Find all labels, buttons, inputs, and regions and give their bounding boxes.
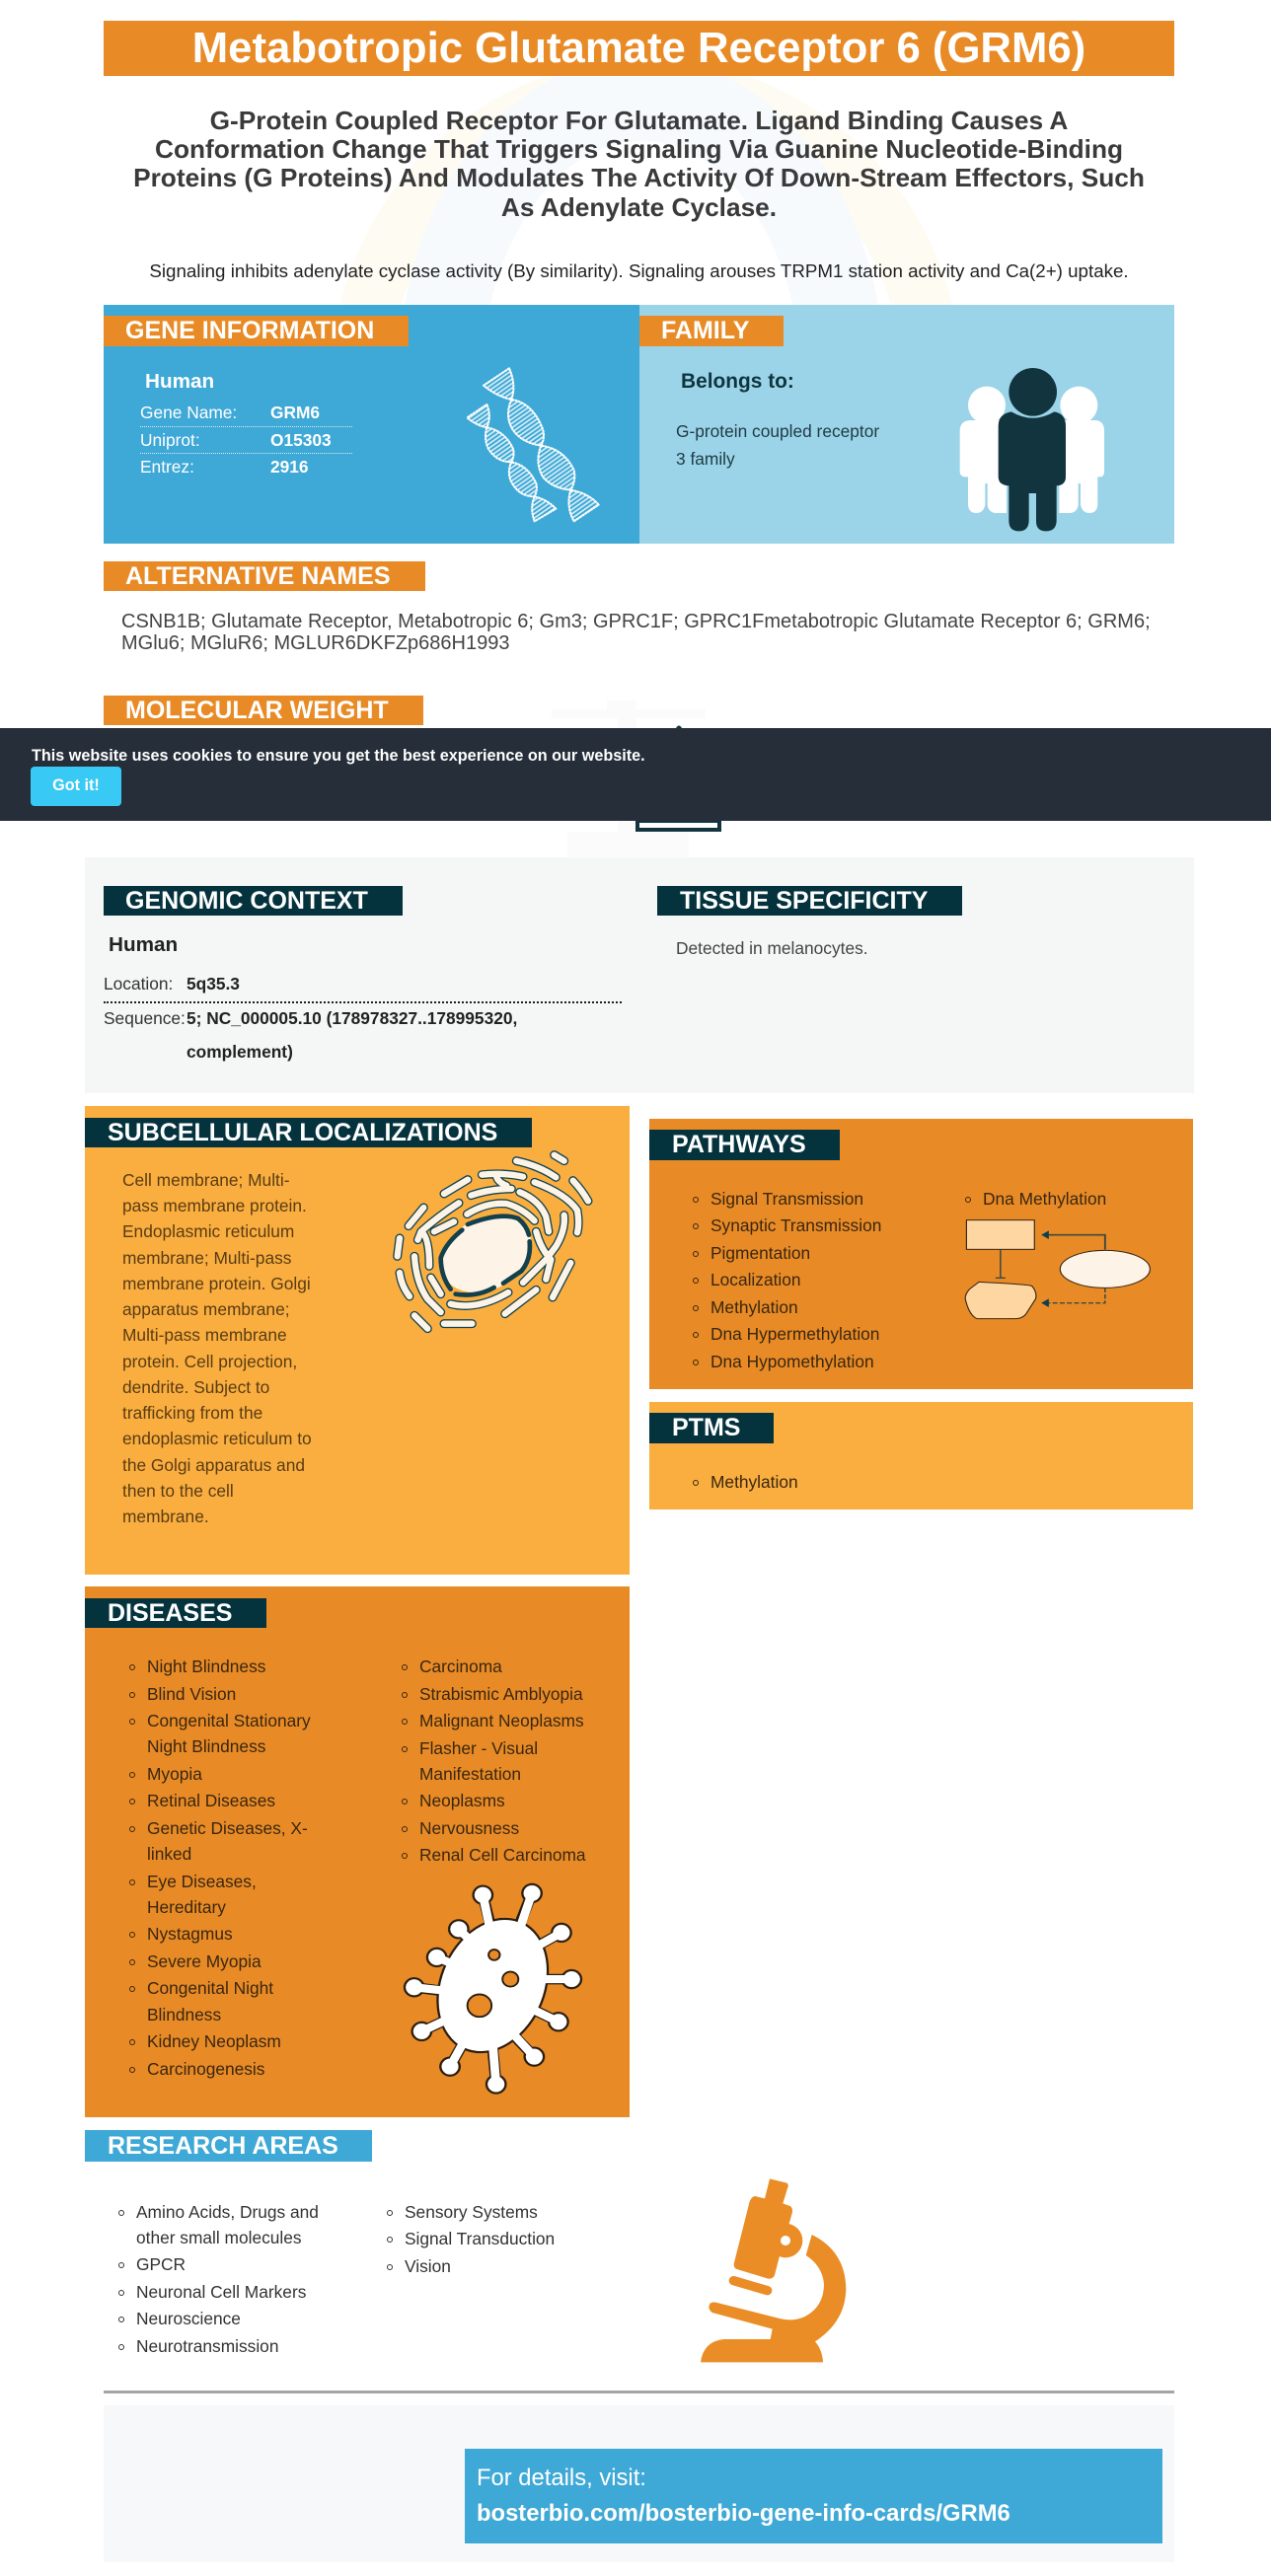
- diseases list: column one: Eye Diseases,: [147, 1872, 257, 1891]
- diseases list: column one: Night Blindness: [147, 1656, 265, 1676]
- icon: virus: [403, 1882, 582, 2095]
- heading: diseases: DISEASES: [108, 1599, 232, 1627]
- family details: Belongs to:: [681, 370, 794, 393]
- subcellular localizations text: Endoplasmic reticulum: [122, 1221, 294, 1241]
- cookie banner: [0, 728, 1271, 821]
- research areas list: column two: Signal Transduction: [405, 2229, 555, 2248]
- genomic context details: Location:: [104, 974, 173, 994]
- heading: diseases: [85, 1598, 266, 1628]
- diseases list: column one: Nystagmus: [147, 1924, 233, 1944]
- subcellular localizations text: [122, 1170, 312, 1526]
- research areas list: column two: Vision: [405, 2256, 451, 2276]
- subcellular localizations text: trafficking from the: [122, 1403, 262, 1423]
- PTMs list: Methylation: [710, 1472, 798, 1492]
- family details: [676, 370, 879, 469]
- pathways list: Dna Hypomethylation: [710, 1352, 874, 1371]
- panel: genomic context and tissue specificity: [85, 857, 1194, 1093]
- diseases list: column one: linked: [147, 1844, 191, 1864]
- gene information details: 2916: [270, 457, 309, 477]
- heading: subcellular localizations: SUBCELLULAR LOCALIZATIONS: [108, 1119, 497, 1146]
- research areas list: column one: GPCR: [136, 2254, 186, 2274]
- pathways list: Pigmentation: [710, 1243, 810, 1263]
- diseases list: column two: Neoplasms: [419, 1791, 505, 1810]
- button: got it: [31, 767, 121, 806]
- heading: pathways: [649, 1130, 840, 1160]
- tissue specificity text: Detected in melanocytes.: [676, 938, 868, 958]
- subcellular localizations text: then to the cell: [122, 1481, 234, 1501]
- diseases list: column one: Severe Myopia: [147, 1951, 262, 1971]
- heading: gene information: GENE INFORMATION: [125, 317, 374, 344]
- research areas list: column one: other small molecules: [136, 2228, 302, 2247]
- pathways list: [693, 1189, 1106, 1371]
- gene information details: Entrez:: [140, 457, 194, 477]
- summary heading: As Adenylate Cyclase.: [501, 192, 777, 222]
- research areas list: column one: [118, 2202, 319, 2356]
- diseases list: column one: Carcinogenesis: [147, 2059, 264, 2079]
- diseases list: column one: Genetic Diseases, X-: [147, 1818, 308, 1838]
- family details: 3 family: [676, 449, 735, 469]
- gene information details: [140, 370, 352, 477]
- heading: family: [639, 316, 784, 346]
- genomic context details: 5; NC_000005.10 (178978327..178995320,: [187, 1008, 517, 1028]
- genomic context details: 5q35.3: [187, 974, 240, 994]
- heading: molecular weight: MOLECULAR WEIGHT: [125, 697, 389, 724]
- panel: diseases: [85, 1586, 630, 2117]
- family details: G-protein coupled receptor: [676, 421, 879, 441]
- summary heading: [133, 106, 1145, 222]
- alternative names text: [121, 611, 1151, 654]
- diseases list: column two: Renal Cell Carcinoma: [419, 1845, 586, 1865]
- alternative names text: MGlu6; MGluR6; MGLUR6DKFZp686H1993: [121, 632, 509, 654]
- function description: Signaling inhibits adenylate cyclase activity (By similarity). Signaling arouses TRPM1 station activity and Ca(2+) uptake.: [149, 260, 1129, 281]
- pathways list: Dna Hypermethylation: [710, 1324, 879, 1344]
- button: got it: Got it!: [52, 776, 100, 794]
- summary heading: Conformation Change That Triggers Signaling Via Guanine Nucleotide-Binding: [155, 134, 1123, 164]
- subcellular localizations text: Multi-pass membrane: [122, 1325, 287, 1345]
- title banner: Metabotropic Glutamate Receptor 6 (GRM6): [192, 24, 1085, 72]
- summary heading: G-Protein Coupled Receptor For Glutamate. Ligand Binding Causes A: [210, 106, 1068, 135]
- heading: research areas: RESEARCH AREAS: [108, 2132, 338, 2160]
- heading: alternative names: ALTERNATIVE NAMES: [125, 562, 391, 590]
- diseases list: column two: Nervousness: [419, 1818, 519, 1838]
- diseases list: column two: Carcinoma: [419, 1656, 502, 1676]
- genomic context details: Human: [109, 933, 178, 956]
- diseases list: column one: Myopia: [147, 1764, 202, 1784]
- subcellular localizations text: apparatus membrane;: [122, 1299, 290, 1319]
- pathways list: Dna Methylation: [983, 1189, 1106, 1209]
- panel: subcellular localizations: [85, 1106, 630, 1575]
- pathways list: Signal Transmission: [710, 1189, 863, 1209]
- subcellular localizations text: the Golgi apparatus and: [122, 1455, 305, 1475]
- pathways list: Methylation: [710, 1297, 798, 1317]
- diseases list: column one: Congenital Stationary: [147, 1711, 311, 1730]
- genomic context details: complement): [187, 1042, 293, 1062]
- subcellular localizations text: membrane protein. Golgi: [122, 1274, 311, 1293]
- panel: pathways: [649, 1119, 1193, 1389]
- icon: DNA helices: [466, 367, 600, 523]
- subcellular localizations text: pass membrane protein.: [122, 1196, 307, 1215]
- icon: pathway diagram: [965, 1219, 1151, 1320]
- faint background watermark arcs: [340, 77, 952, 305]
- diseases list: column one: Blind Vision: [147, 1684, 236, 1704]
- genomic context details: [104, 933, 622, 1062]
- gene information details: O15303: [270, 430, 332, 450]
- gene information details: Human: [145, 370, 214, 393]
- research areas list: column one: Neuroscience: [136, 2309, 241, 2328]
- footer panel: [104, 2405, 1174, 2562]
- research areas list: column two: Sensory Systems: [405, 2202, 538, 2222]
- icon: faint weighing scale: [636, 726, 721, 832]
- diseases list: column one: Night Blindness: [147, 1736, 265, 1756]
- subcellular localizations text: membrane; Multi-pass: [122, 1248, 291, 1268]
- diseases list: column two: Malignant Neoplasms: [419, 1711, 584, 1730]
- cookie banner: This website uses cookies to ensure you get the best experience on our website.: [32, 747, 645, 765]
- gene information details: Uniprot:: [140, 430, 200, 450]
- research areas list: column one: Neurotransmission: [136, 2336, 278, 2356]
- call to action box: For details, visit:: [477, 2465, 646, 2491]
- subcellular localizations text: endoplasmic reticulum to: [122, 1429, 312, 1448]
- research areas list: column two: [387, 2202, 555, 2276]
- gene information details: GRM6: [270, 403, 320, 422]
- pathways list: Synaptic Transmission: [710, 1215, 881, 1235]
- icon: microscope: [701, 2178, 847, 2362]
- diseases list: column two: Flasher - Visual: [419, 1738, 538, 1758]
- diseases list: column two: Strabismic Amblyopia: [419, 1684, 583, 1704]
- subcellular localizations text: membrane.: [122, 1507, 209, 1526]
- summary heading: Proteins (G Proteins) And Modulates The Activity Of Down-Stream Effectors, Such: [133, 163, 1145, 192]
- icon: endoplasmic reticulum: [393, 1150, 592, 1334]
- research areas list: column one: Amino Acids, Drugs and: [136, 2202, 319, 2222]
- heading: PTMs: [649, 1413, 774, 1443]
- pathways list: Localization: [710, 1270, 801, 1289]
- diseases list: column one: Kidney Neoplasm: [147, 2031, 281, 2051]
- panel: gene information: [104, 305, 639, 544]
- heading: genomic context: GENOMIC CONTEXT: [125, 887, 368, 915]
- genomic context details: Sequence:: [104, 1008, 186, 1028]
- divider rule: [104, 2391, 1174, 2393]
- call to action box: [465, 2449, 1162, 2543]
- diseases list: column one: [129, 1656, 311, 2079]
- icon: group of people: [959, 368, 1104, 531]
- alternative names text: CSNB1B; Glutamate Receptor, Metabotropic 6; Gm3; GPRC1F; GPRC1Fmetabotropic Glutamate Receptor 6; GRM6;: [121, 611, 1151, 632]
- diseases list: column two: Manifestation: [419, 1764, 521, 1784]
- diseases list: column one: Congenital Night: [147, 1978, 273, 1998]
- panel: PTMs: [649, 1402, 1193, 1509]
- subcellular localizations text: protein. Cell projection,: [122, 1352, 297, 1371]
- panel: family: [639, 305, 1174, 544]
- subcellular localizations text: dendrite. Subject to: [122, 1377, 269, 1397]
- heading: pathways: PATHWAYS: [672, 1131, 806, 1158]
- diseases list: column one: Hereditary: [147, 1897, 226, 1917]
- heading: family: FAMILY: [661, 317, 749, 344]
- research areas list: column one: Neuronal Cell Markers: [136, 2282, 306, 2302]
- call to action box: bosterbio.com/bosterbio-gene-info-cards/GRM6: [477, 2500, 1010, 2527]
- subcellular localizations text: Cell membrane; Multi-: [122, 1170, 289, 1190]
- heading: tissue specificity: TISSUE SPECIFICITY: [680, 887, 928, 915]
- heading: PTMs: PTMS: [672, 1414, 740, 1441]
- diseases list: column two: [402, 1656, 586, 1865]
- gene information details: Gene Name:: [140, 403, 237, 422]
- diseases list: column one: Retinal Diseases: [147, 1791, 275, 1810]
- diseases list: column one: Blindness: [147, 2005, 221, 2024]
